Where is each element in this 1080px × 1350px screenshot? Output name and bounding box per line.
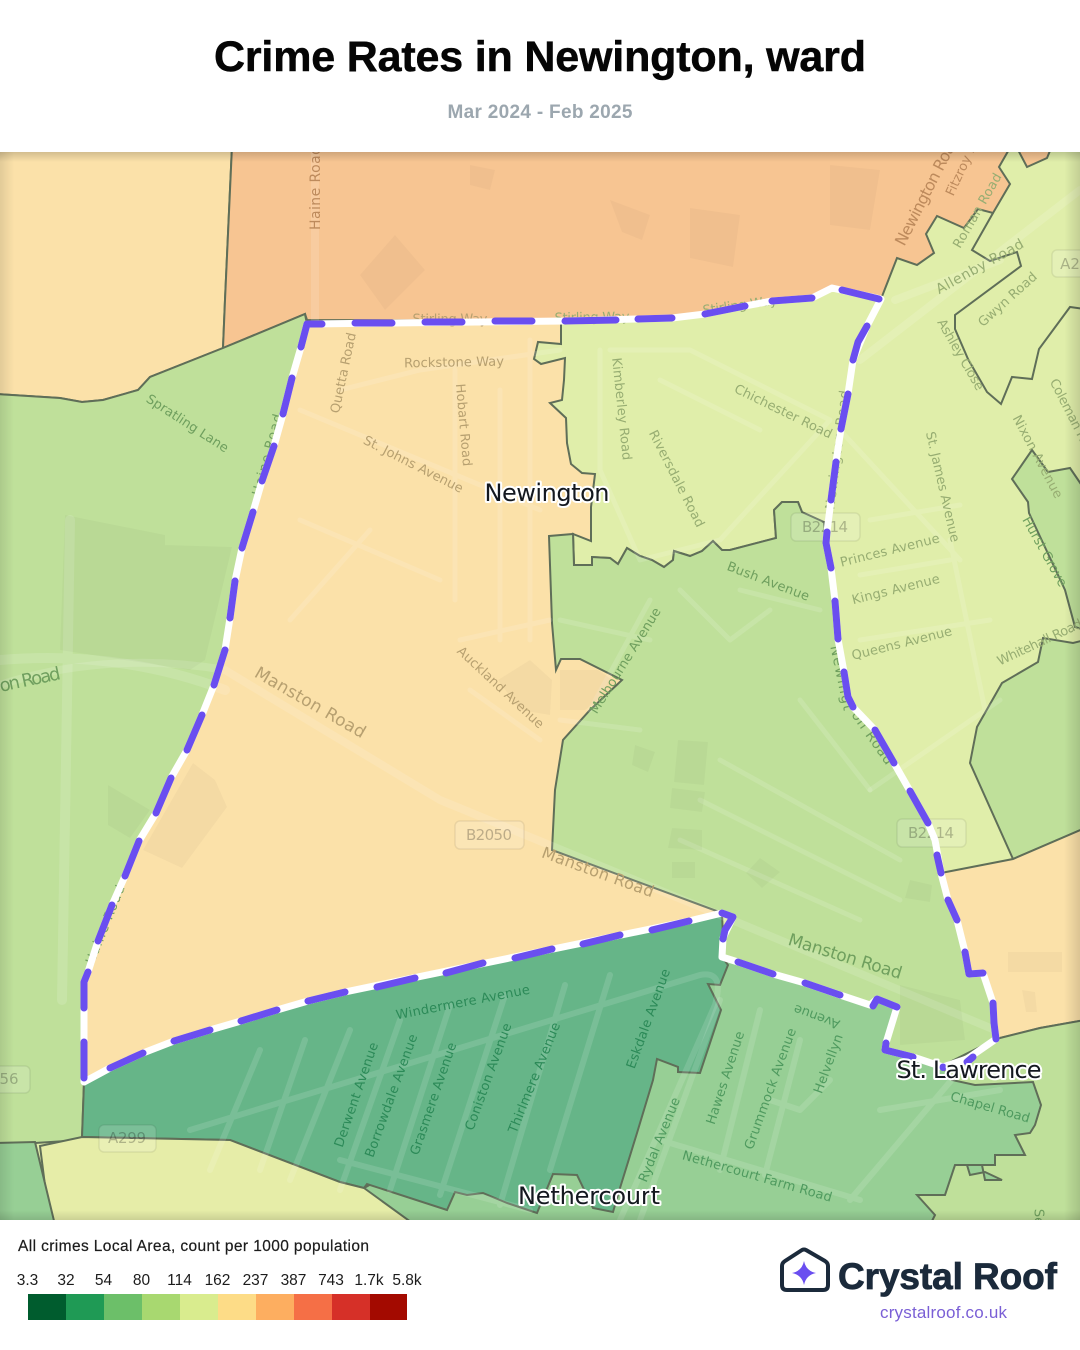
legend tick values: 743 <box>318 1272 344 1289</box>
wordmark: Crystal Roof <box>838 1256 1058 1297</box>
street labels: Grasmere Avenue <box>408 1041 460 1157</box>
legend heading: All crimes Local Area, count per 1000 population <box>18 1238 369 1255</box>
region: Nethercourt medium green <box>340 957 1041 1225</box>
street labels: Chapel Road <box>949 1089 1031 1127</box>
region: far east mid green <box>1012 450 1080 630</box>
street labels: Bush Avenue <box>725 559 811 605</box>
road shield labels: A299 <box>108 1129 146 1147</box>
region: south-east cream <box>941 828 1080 1039</box>
region: west green <box>0 314 307 1143</box>
region: south-west green <box>0 1142 55 1225</box>
street labels: Gwyn Road <box>975 270 1041 330</box>
street labels: St. James Avenue <box>922 430 962 544</box>
region: east mid green <box>970 638 1080 859</box>
legend tick values: 237 <box>243 1272 268 1289</box>
street labels: Allenby Road <box>933 236 1027 298</box>
region: central pale green <box>532 324 803 566</box>
street labels: Nethercourt Farm Road <box>680 1148 834 1206</box>
street labels: Hurst Grove <box>1019 514 1069 590</box>
street labels: Stirling Way <box>412 312 488 328</box>
place labels: Newington <box>484 479 610 507</box>
street labels: Borrowdale Avenue <box>363 1032 421 1160</box>
street labels: St. Johns Avenue <box>361 433 465 497</box>
subtitle: date range: Mar 2024 - Feb 2025 <box>448 102 633 123</box>
legend tick values: 3.3 <box>17 1272 38 1289</box>
region: orange north <box>223 146 1011 348</box>
street labels: Princes Avenue <box>839 531 941 571</box>
region: orange small top right <box>1018 152 1050 168</box>
place labels <box>484 479 1042 1210</box>
region: south-east green <box>920 1020 1080 1220</box>
road shield labels: B2050 <box>466 826 512 844</box>
legend colour scale <box>28 1294 407 1320</box>
street labels: Roman Road <box>951 171 1005 251</box>
road shield labels: B2214 <box>802 518 848 536</box>
street labels: Kimberley Road <box>608 357 634 461</box>
street labels: Riversdale Road <box>645 428 707 530</box>
map base: pale green band <box>0 152 1080 1220</box>
street labels: Queens Avenue <box>850 624 954 664</box>
buildings and land-use patches <box>60 165 1062 1045</box>
street labels: Fitzroy Road <box>943 120 991 198</box>
street labels: Chichester Road <box>732 382 834 442</box>
region: central mid green <box>549 502 996 1067</box>
website: crystalroof.co.uk <box>880 1303 1008 1322</box>
road shields <box>0 250 1080 1152</box>
street labels: Newington Road <box>891 131 963 249</box>
street labels: Rydal Avenue <box>636 1095 684 1185</box>
street labels: Eskdale Avenue <box>624 967 674 1071</box>
street labels: Haine Road <box>83 883 129 967</box>
street labels: Derwent Avenue <box>332 1041 382 1149</box>
region: south-west pale <box>40 1137 415 1225</box>
street labels: Rockstone Way <box>404 355 504 371</box>
street labels: Melbourne Avenue <box>587 605 665 717</box>
street labels: Stirling Way <box>702 293 778 319</box>
title: Crime Rates in Newington, ward <box>214 33 866 81</box>
street labels: Auckland Avenue <box>454 644 546 732</box>
road shield labels: A2 <box>1060 255 1080 273</box>
street labels: Newington Road <box>823 390 853 510</box>
road shield labels <box>0 255 1080 1147</box>
street labels: Kings Avenue <box>851 572 941 608</box>
legend tick values: 387 <box>281 1272 306 1289</box>
road shield labels: B2214 <box>908 824 954 842</box>
street labels: Newingt <box>826 644 856 712</box>
street labels: on Road <box>848 708 896 768</box>
street labels: Hawes Avenue <box>704 1030 748 1126</box>
legend tick values: 32 <box>57 1272 75 1289</box>
street labels: Spratling Lane <box>143 392 231 456</box>
street labels: Manston Road <box>539 843 657 901</box>
street labels: Grummock Avenue <box>742 1026 800 1152</box>
street network <box>0 152 1080 1220</box>
street labels: Nixon Avenue <box>1009 413 1065 501</box>
street labels: Helvellyn <box>811 1032 847 1096</box>
region: Nethercourt dark green <box>82 913 728 1213</box>
map edge vignette <box>0 152 1080 1220</box>
street labels: Ashley Close <box>934 317 986 393</box>
street labels: Hobart Road <box>452 383 474 467</box>
region: central cream <box>84 321 722 1082</box>
legend tick values <box>17 1272 422 1289</box>
place labels: St. Lawrence <box>896 1056 1042 1084</box>
logo: Crystal Roof <box>782 1250 1058 1322</box>
street labels: Manston Road <box>786 930 904 984</box>
street labels: Haine Road <box>308 146 324 230</box>
legend tick values: 80 <box>133 1272 150 1289</box>
street labels: Thirlmere Avenue <box>506 1020 564 1136</box>
street labels: Haine Road <box>250 412 286 498</box>
legend tick values: 5.8k <box>392 1272 422 1289</box>
street labels: Manston Road <box>251 663 369 743</box>
ward boundary: purple dashes <box>84 290 996 1078</box>
road shield labels: 56 <box>0 1070 19 1088</box>
icon: house with star <box>782 1250 828 1290</box>
place labels: Nethercourt <box>518 1182 660 1210</box>
legend tick values: 114 <box>167 1272 192 1289</box>
street labels: Windermere Avenue <box>395 983 531 1023</box>
street labels: Stirling Way <box>554 310 630 326</box>
street labels: Se <box>1030 1209 1046 1225</box>
east interior ward lines <box>955 213 1080 404</box>
street labels: Avenue <box>792 1001 842 1031</box>
street labels: Quetta Road <box>328 331 360 415</box>
legend tick values: 54 <box>95 1272 112 1289</box>
ward boundary: white line <box>84 288 996 1082</box>
region: top-left cream <box>0 146 232 402</box>
legend <box>17 1238 422 1320</box>
legend tick values: 1.7k <box>354 1272 384 1289</box>
legend tick values: 162 <box>205 1272 230 1289</box>
street labels: Coniston Avenue <box>463 1021 515 1133</box>
